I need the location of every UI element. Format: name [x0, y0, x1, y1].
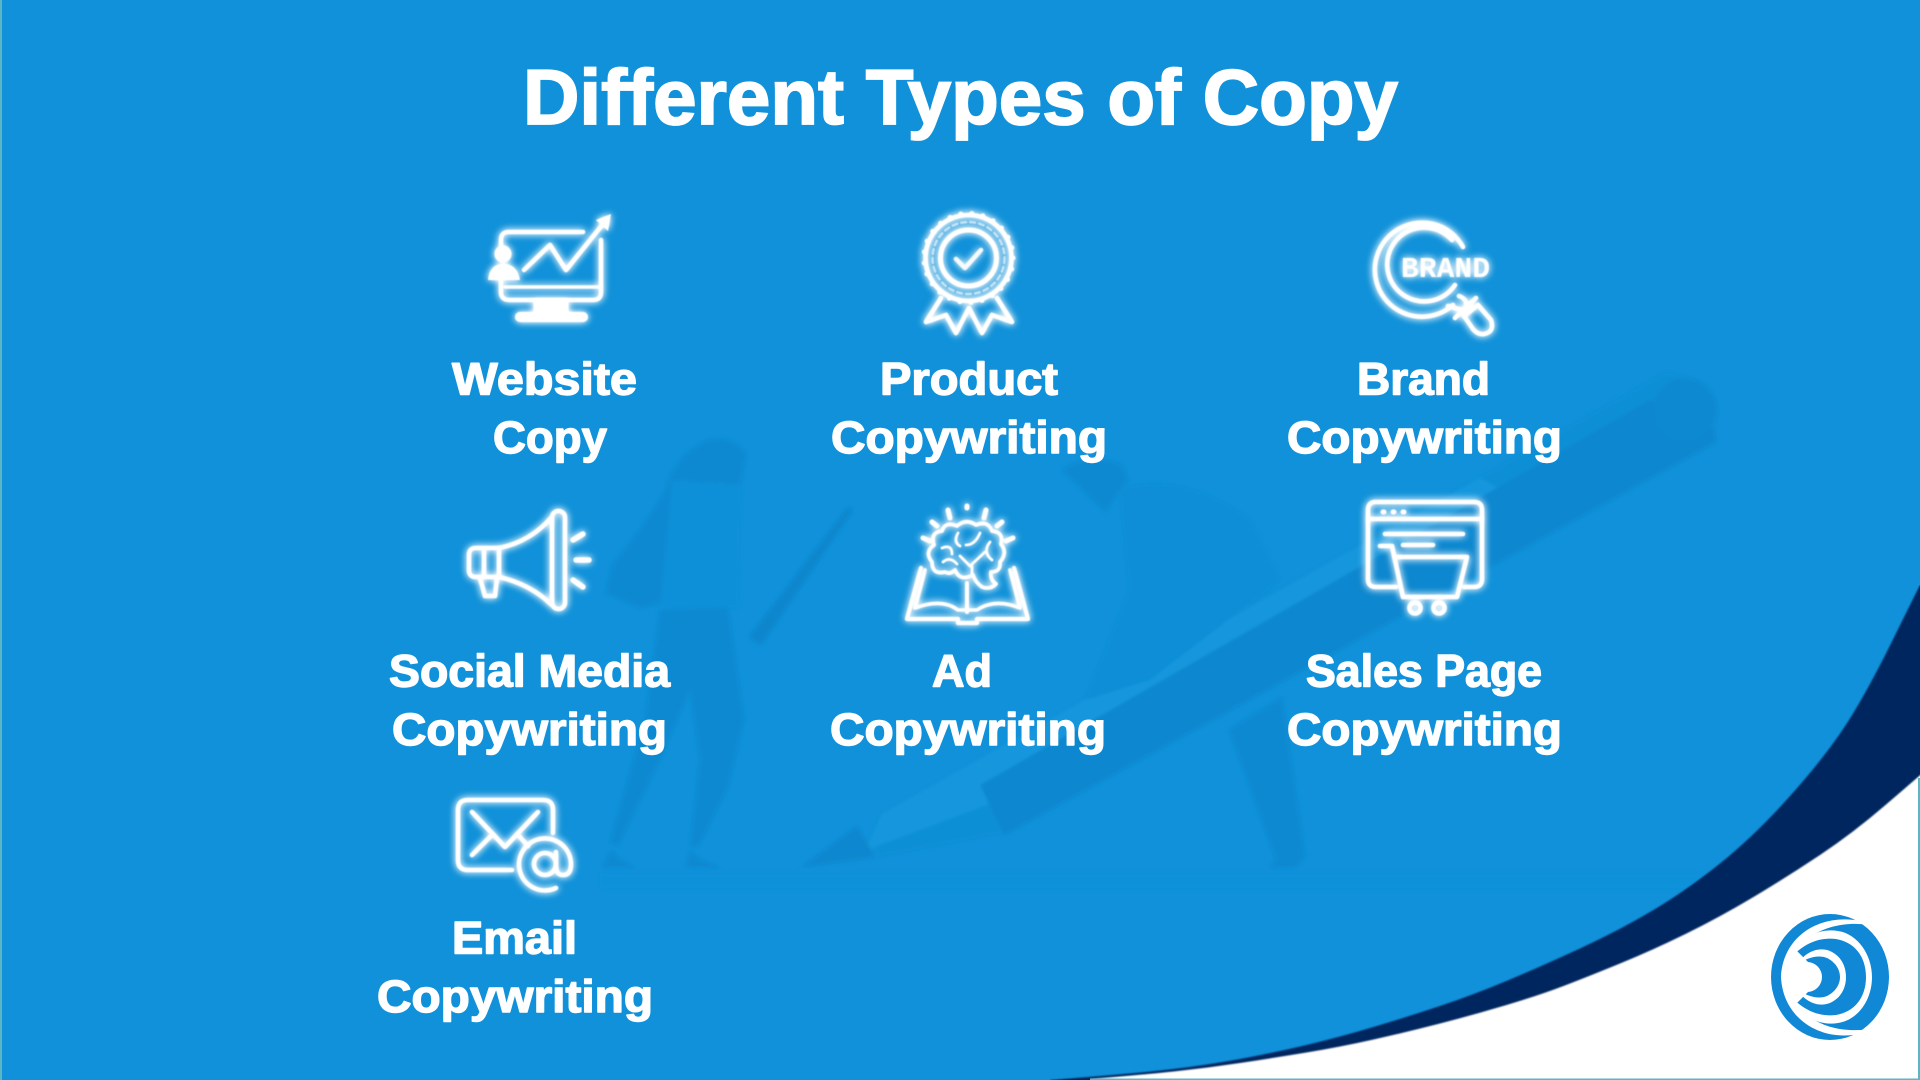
item: Social Media Copywriting — [389, 511, 671, 755]
icon: envelope with at sign — [458, 800, 571, 890]
label: Brand Copywriting: Copywriting — [1287, 412, 1562, 463]
watermark: ground — [600, 874, 1700, 888]
label: Brand Copywriting: Brand — [1357, 354, 1490, 404]
icon: award rosette with checkmark — [924, 214, 1013, 333]
item: Sales Page Copywriting — [1287, 502, 1562, 755]
watermark: woman and man lifting a giant pen — [600, 373, 1717, 888]
label: Sales Page Copywriting — [1287, 646, 1562, 755]
label: Social Media Copywriting — [389, 646, 671, 755]
item: Ad Copywriting — [830, 506, 1106, 755]
item: Product Copywriting — [831, 214, 1107, 463]
watermark: man — [1062, 460, 1305, 868]
icon: magnifying glass over BRAND: BRAND — [1401, 253, 1490, 286]
label: Social Media Copywriting: Social Media — [389, 646, 671, 696]
label: Product Copywriting: Copywriting — [831, 412, 1107, 463]
item: Email Copywriting — [377, 800, 653, 1022]
title: Different Types of Copy — [523, 53, 1398, 141]
watermark: giant pen — [802, 373, 1717, 867]
label: Product Copywriting: Product — [880, 354, 1058, 404]
label: Sales Page Copywriting: Copywriting — [1287, 704, 1562, 755]
label: Brand Copywriting — [1287, 354, 1562, 463]
corner: white area — [1090, 771, 1920, 1080]
icon: brain over open book — [907, 506, 1028, 623]
label: Email Copywriting: Email — [452, 912, 577, 964]
icon: megaphone — [469, 511, 589, 609]
logo: blue swirl — [1771, 914, 1889, 1040]
watermark: man body — [1085, 484, 1280, 700]
corner: navy swoosh — [1050, 585, 1920, 1080]
label: Product Copywriting — [831, 354, 1107, 463]
label: Website Copy — [452, 354, 637, 463]
icon: monitor with rising chart and presenter — [488, 214, 611, 317]
icon: browser window with shopping cart — [1368, 502, 1482, 614]
watermark: woman torso — [660, 480, 740, 610]
label: Ad Copywriting: Copywriting — [830, 704, 1106, 755]
item: Website Copy — [452, 214, 637, 463]
icon: magnifying glass over BRAND — [1375, 223, 1492, 334]
label: Email Copywriting — [377, 912, 653, 1022]
label: Ad Copywriting: Ad — [932, 646, 992, 696]
label: Website Copy: Website — [452, 354, 637, 404]
item: Brand Copywriting — [1287, 223, 1562, 463]
label: Ad Copywriting — [830, 646, 1106, 755]
watermark: woman — [602, 439, 853, 868]
label: Email Copywriting: Copywriting — [377, 971, 653, 1022]
label: Social Media Copywriting: Copywriting — [392, 704, 667, 755]
label: Sales Page Copywriting: Sales Page — [1306, 646, 1542, 696]
label: Website Copy: Copy — [493, 412, 607, 463]
